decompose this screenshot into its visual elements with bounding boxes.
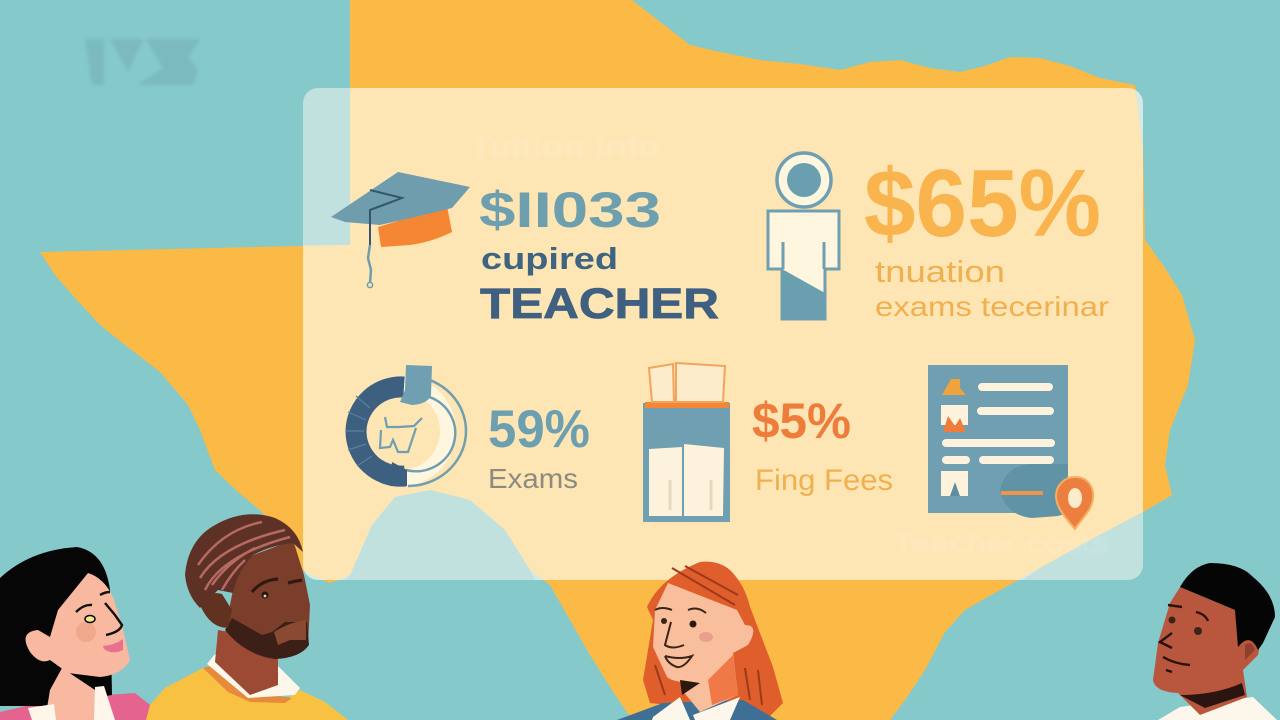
label: cupired: cupired bbox=[481, 241, 618, 276]
stat: 5 percent: $5% bbox=[752, 393, 851, 449]
person: woman with black hair bbox=[0, 547, 150, 720]
translucent content panel bbox=[303, 88, 1143, 580]
label: exams tecerinar: exams tecerinar bbox=[875, 291, 1109, 322]
label: Exams: Exams bbox=[488, 463, 578, 494]
label: Fing Fees: Fing Fees bbox=[755, 464, 893, 497]
stat: 65 percent: $65% bbox=[864, 150, 1101, 257]
stat: 59 percent: 59% bbox=[488, 400, 590, 459]
icon: graduation cap bbox=[331, 172, 470, 288]
label: TEACHER: TEACHER bbox=[480, 280, 719, 328]
faint heading: Tuition Info bbox=[470, 131, 660, 164]
faint footnote: Teacher costs bbox=[893, 528, 1108, 558]
panel tint over water bbox=[303, 88, 1143, 580]
logo watermark bbox=[85, 39, 200, 85]
icon: document card with pin bbox=[928, 365, 1093, 529]
person: man with beard and yellow sweater bbox=[146, 514, 348, 720]
stat: cost figure: $II033 bbox=[479, 182, 661, 238]
person: woman with red hair bbox=[617, 562, 783, 720]
label: tnuation: tnuation bbox=[875, 254, 1005, 289]
icon: exam ring bbox=[346, 365, 466, 486]
icon: person figure bbox=[768, 153, 839, 319]
person: man looking upward bbox=[1153, 563, 1277, 720]
icon: books bbox=[643, 363, 730, 522]
